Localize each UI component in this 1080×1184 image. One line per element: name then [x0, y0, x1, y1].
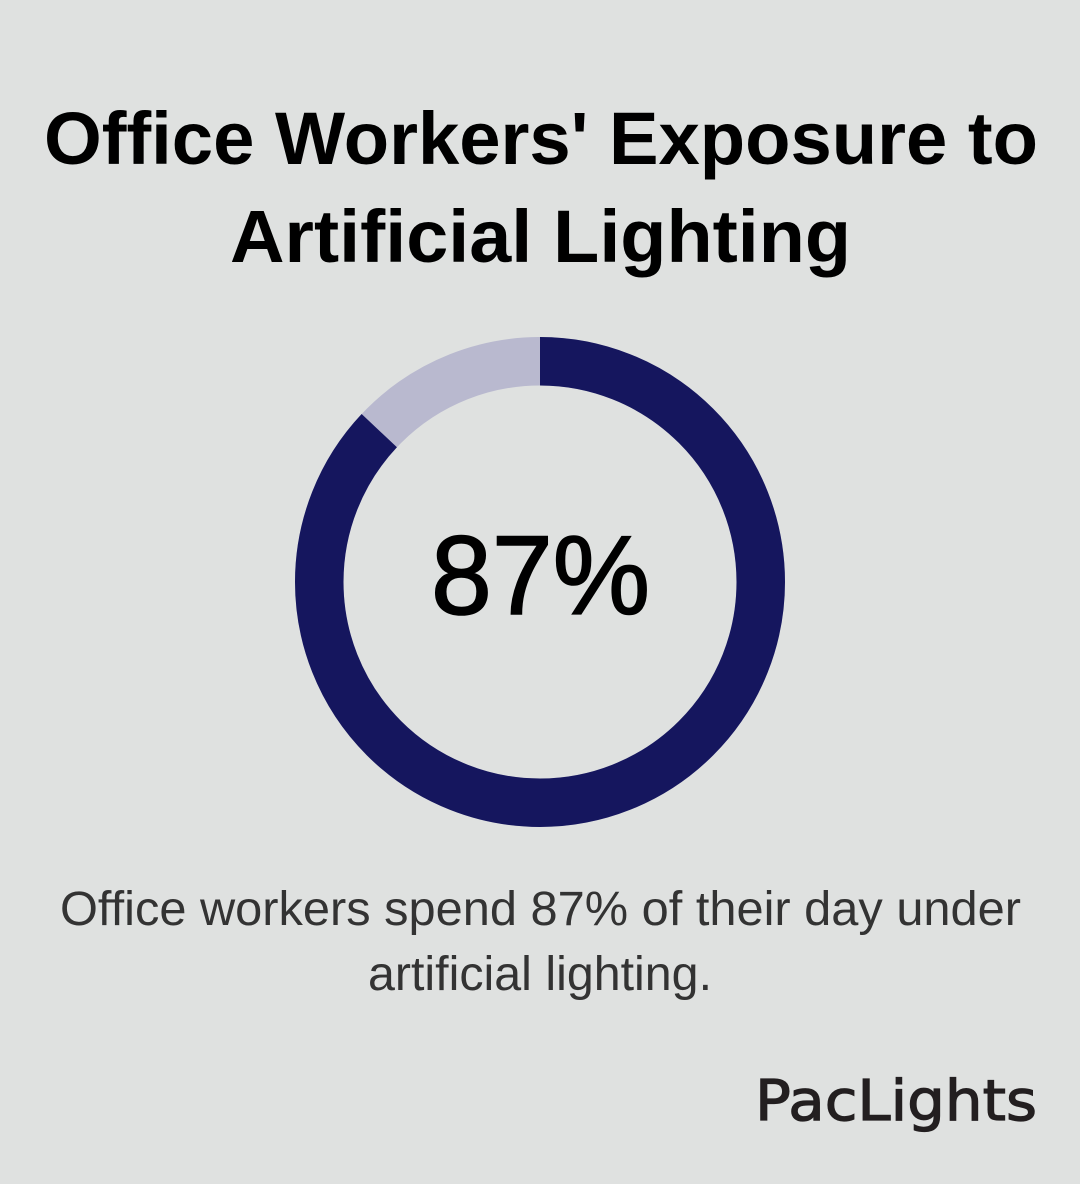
description text: artificial lighting.: [368, 948, 712, 1001]
description text: Office workers spend 87% of their day under: [60, 883, 1021, 936]
donut chart: 87 percent: [319, 361, 761, 803]
title: Artificial Lighting: [230, 195, 851, 278]
title: Office Workers' Exposure to: [44, 97, 1038, 180]
donut centre value: 87%: [431, 513, 650, 638]
description text: [60, 883, 1021, 1001]
title: [44, 97, 1038, 278]
PacLights logo: PacLights: [755, 1069, 1037, 1134]
